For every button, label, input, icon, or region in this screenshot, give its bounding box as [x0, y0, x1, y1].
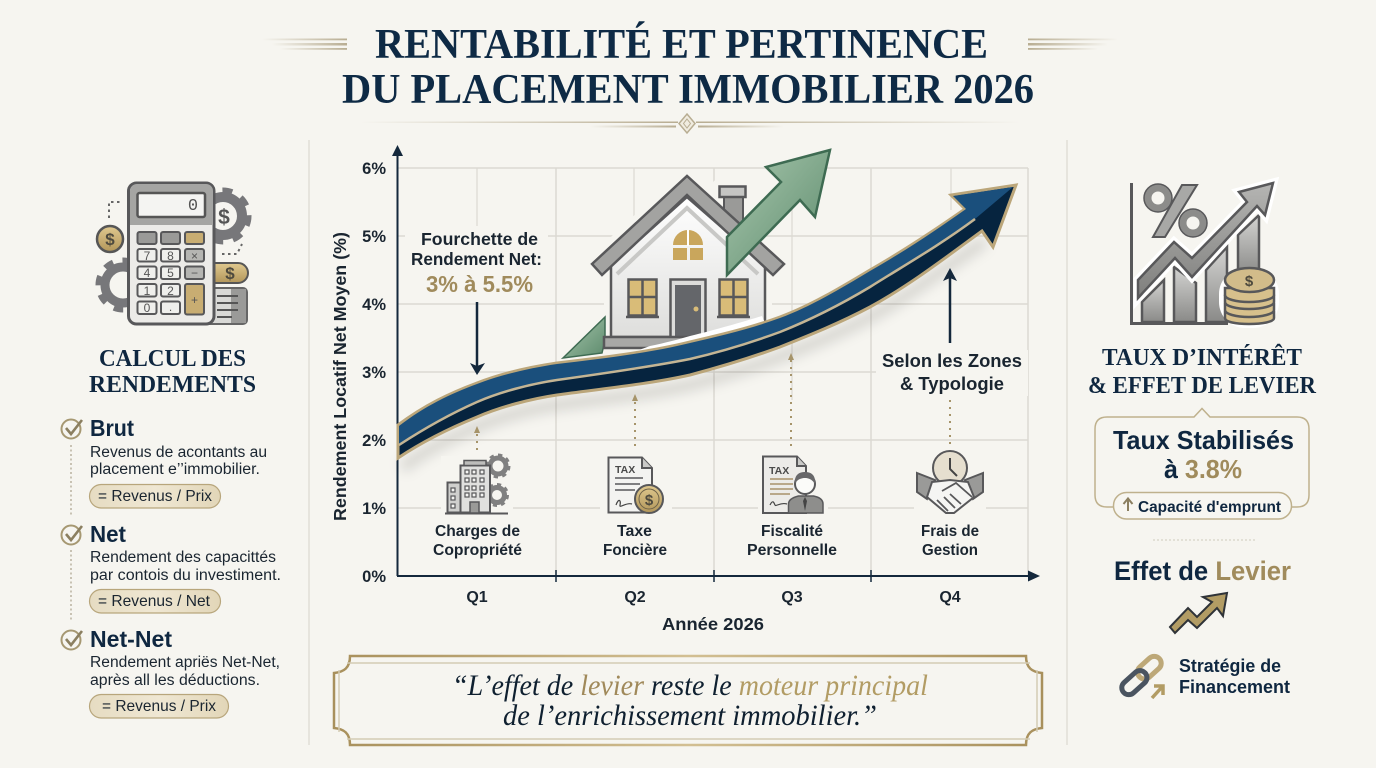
icon: calculator with gears and coins: 2 — [167, 284, 174, 298]
icon: calculator with gears and coins: $ — [225, 264, 235, 283]
item: brut: Revenus de acontants au — [90, 444, 267, 461]
icon: check brut — [62, 420, 82, 438]
quote box: “L’effet de levier reste le moteur principal — [452, 669, 928, 702]
item: net: Net — [90, 521, 126, 547]
y axis: 4% — [362, 296, 386, 314]
item: net-net: après all les déductions. — [90, 672, 260, 689]
item: frais de gestion: Frais de — [921, 523, 979, 540]
icon: calculator with gears and coins: 7 — [144, 249, 151, 263]
y axis: 2% — [362, 432, 386, 450]
icon: house with green arrow — [563, 150, 830, 358]
pill: formule net-net: = Revenus / Prix — [102, 698, 216, 715]
icon: check net-net — [62, 630, 82, 650]
item: net-net: Net-Net — [90, 626, 172, 652]
icon: calculator with gears and coins: 5 — [167, 266, 174, 280]
ribbon body — [398, 185, 1016, 458]
title: DU PLACEMENT IMMOBILIER 2026 — [342, 67, 1034, 113]
quote box: de l’enrichissement immobilier.” — [503, 699, 877, 732]
heading: effet de levier: Effet de Levier — [1114, 556, 1291, 586]
panel: calcul des rendements — [62, 183, 281, 718]
item: fiscalite personnelle: Fiscalité — [761, 523, 823, 540]
y axis: 3% — [362, 364, 386, 382]
item: fiscalite personnelle — [747, 452, 837, 559]
icon: calculator with gears and coins: 8 — [167, 249, 174, 263]
item: charges de copropriete — [433, 455, 522, 559]
callout: fourchette de rendement: Fourchette de — [421, 229, 538, 249]
icon: tax document with coin — [608, 458, 663, 513]
heading: taux d'interet — [1088, 344, 1317, 399]
item: brut — [62, 415, 267, 508]
item: charges de copropriete: Charges de — [435, 523, 520, 540]
callout: selon les zones: Selon les Zones — [882, 351, 1022, 371]
icon: calculator with gears and coins: 0 — [144, 301, 151, 315]
x axis: Q3 — [781, 589, 803, 606]
icon: check net — [62, 526, 82, 544]
heading: taux d'interet: TAUX D’INTÉRÊT — [1102, 344, 1302, 371]
icon: calculator with gears and coins: 4 — [144, 266, 151, 280]
icon: calculator with gears and coins: × — [191, 249, 198, 263]
icon: calculator with gears and coins: $ — [105, 230, 115, 249]
chart: rendement locatif net moyen — [330, 145, 1040, 634]
y axis: 0% — [362, 568, 386, 586]
icon: calculator with gears and coins — [97, 183, 248, 324]
icon: chain link — [1119, 653, 1164, 698]
arrow: vers la courbe q4 — [943, 268, 957, 343]
label: strategie de financement: Stratégie de — [1179, 656, 1281, 676]
item: taxe fonciere — [600, 452, 672, 559]
pill: formule net: = Revenus / Net — [98, 593, 211, 610]
callout: fourchette de rendement: 3% à 5.5% — [426, 271, 533, 297]
callout: fourchette de rendement: Rendement Net: — [411, 249, 542, 269]
icon: calculator with gears and coins: + — [191, 293, 198, 307]
item: taxe fonciere: Foncière — [603, 542, 667, 559]
item: frais de gestion — [914, 448, 986, 559]
item: charges de copropriete: Copropriété — [433, 542, 522, 559]
item: fiscalite personnelle: Personnelle — [747, 542, 837, 559]
item: net: par contois du investiment. — [90, 567, 281, 584]
y axis: 5% — [362, 228, 386, 246]
pill: formule brut: = Revenus / Prix — [98, 488, 212, 505]
x axis: Q2 — [624, 589, 646, 606]
panel: taux d'interet et effet de levier — [1088, 183, 1317, 698]
icon: calculator with gears and coins: $ — [218, 206, 230, 229]
quote frame — [334, 656, 1042, 745]
item: frais de gestion: Gestion — [922, 542, 978, 559]
icon: calculator with gears and coins: 0 — [188, 197, 198, 216]
pill: formule net-net — [90, 694, 228, 718]
callout: taux stabilises: Taux Stabilisés — [1113, 425, 1294, 455]
ribbon arrow: trend curve — [398, 185, 1016, 468]
arrow: vers la courbe — [470, 302, 485, 375]
item: brut: placement e’’immobilier. — [90, 461, 260, 478]
x axis: Q1 — [466, 589, 488, 606]
icon: percent chart with coins — [1132, 183, 1279, 328]
pill: capacite d'emprunt: Capacité d'emprunt — [1138, 499, 1282, 516]
icon: calculator with gears and coins: − — [191, 266, 198, 280]
icon: rising arrow — [1170, 593, 1227, 633]
heading: calcul des rendements — [89, 346, 256, 398]
y axis: 6% — [362, 160, 386, 178]
heading: taux d'interet: & EFFET DE LEVIER — [1088, 373, 1317, 399]
title: RENTABILITÉ ET PERTINENCE — [375, 21, 988, 68]
callout: selon les zones: & Typologie — [900, 374, 1004, 394]
icon: calculator with gears and coins: 1 — [144, 284, 151, 298]
icon: tax document with coin: TAX — [615, 464, 635, 476]
x axis: Année 2026 — [662, 614, 764, 634]
icon: calculator with gears and coins: . — [169, 300, 172, 314]
label: strategie de financement — [1179, 656, 1290, 697]
x axis — [397, 570, 1040, 634]
quote box — [334, 656, 1042, 745]
icon: tax document with coin: $ — [645, 492, 654, 509]
title — [342, 21, 1034, 113]
pill: capacite d'emprunt — [1114, 492, 1292, 519]
callout: taux stabilises — [1095, 408, 1309, 519]
label: strategie de financement: Financement — [1179, 677, 1290, 697]
pill: formule brut — [90, 484, 220, 508]
item: net-net: Rendement apriës Net-Net, — [90, 654, 280, 671]
heading: calcul des rendements: CALCUL DES — [99, 346, 246, 372]
item: net-net — [62, 626, 280, 718]
item: net — [62, 521, 281, 613]
icon: clock and handshake — [917, 451, 983, 513]
item: brut: Brut — [90, 415, 134, 441]
item: net: Rendement des capacittés — [90, 549, 276, 566]
icon: building and gears — [445, 455, 509, 514]
callout: taux stabilises: à 3.8% — [1164, 454, 1242, 484]
callout: selon les zones — [876, 268, 1028, 396]
callout: fourchette de rendement — [405, 226, 548, 375]
y axis: 1% — [362, 500, 386, 518]
x axis: Q4 — [939, 589, 961, 606]
heading: calcul des rendements: RENDEMENTS — [89, 372, 256, 398]
icon: percent chart with coins: $ — [1245, 273, 1254, 290]
item: taxe fonciere: Taxe — [617, 523, 652, 540]
icon: tax form with person: TAX — [769, 465, 789, 477]
y axis: Rendement Locatif Net Moyen (%) — [330, 232, 350, 521]
pill: formule net — [90, 590, 220, 613]
y axis — [330, 145, 403, 586]
